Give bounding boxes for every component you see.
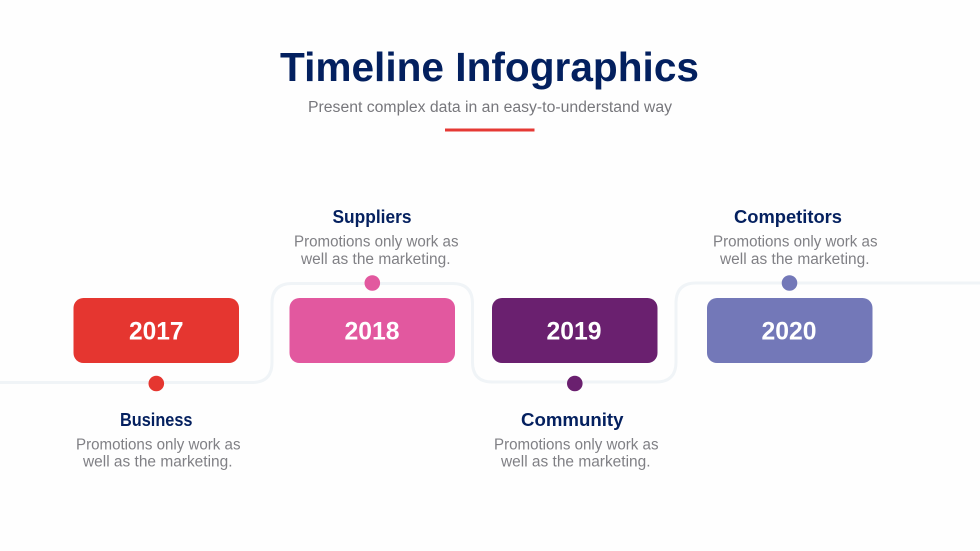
title underline: [445, 128, 534, 132]
marker dot: 2020: [782, 275, 797, 291]
timeline path: [0, 283, 980, 382]
year box: 2020: 2020: [762, 318, 816, 346]
description: Suppliers: well as the marketing.: [300, 251, 450, 268]
year box: 2018: 2018: [344, 318, 400, 346]
milestone: 2018 Suppliers: [290, 206, 459, 363]
description: Community: well as the marketing.: [500, 454, 650, 470]
marker dot: 2019: [567, 376, 583, 391]
description: Competitors: well as the marketing.: [719, 251, 870, 268]
year box: 2017: 2017: [129, 318, 184, 346]
description: Suppliers: Promotions only work as: [294, 234, 459, 250]
description: Business: well as the marketing.: [82, 454, 232, 470]
heading: Community: Community: [521, 409, 624, 430]
heading: Suppliers: Suppliers: [332, 206, 412, 227]
milestone: 2017 Business: [74, 298, 241, 470]
marker dot: 2017: [148, 376, 164, 391]
title: Timeline Infographics: [280, 44, 699, 90]
year box: 2019: [492, 298, 658, 363]
milestone: 2020 Competitors: [707, 206, 878, 363]
year box: 2017: [74, 298, 239, 363]
year box: 2020: [707, 298, 872, 363]
description: Business: Promotions only work as: [76, 436, 241, 454]
year box: 2018: [290, 298, 455, 363]
description: Community: Promotions only work as: [494, 436, 659, 454]
heading: Business: Business: [120, 409, 192, 430]
heading: Competitors: Competitors: [734, 206, 842, 227]
description: Competitors: Promotions only work as: [713, 234, 878, 250]
milestone: 2019 Community: [492, 298, 659, 470]
subtitle: Present complex data in an easy-to-understand way: [308, 99, 672, 116]
marker dot: 2018: [364, 275, 380, 291]
year box: 2019: 2019: [546, 318, 602, 346]
